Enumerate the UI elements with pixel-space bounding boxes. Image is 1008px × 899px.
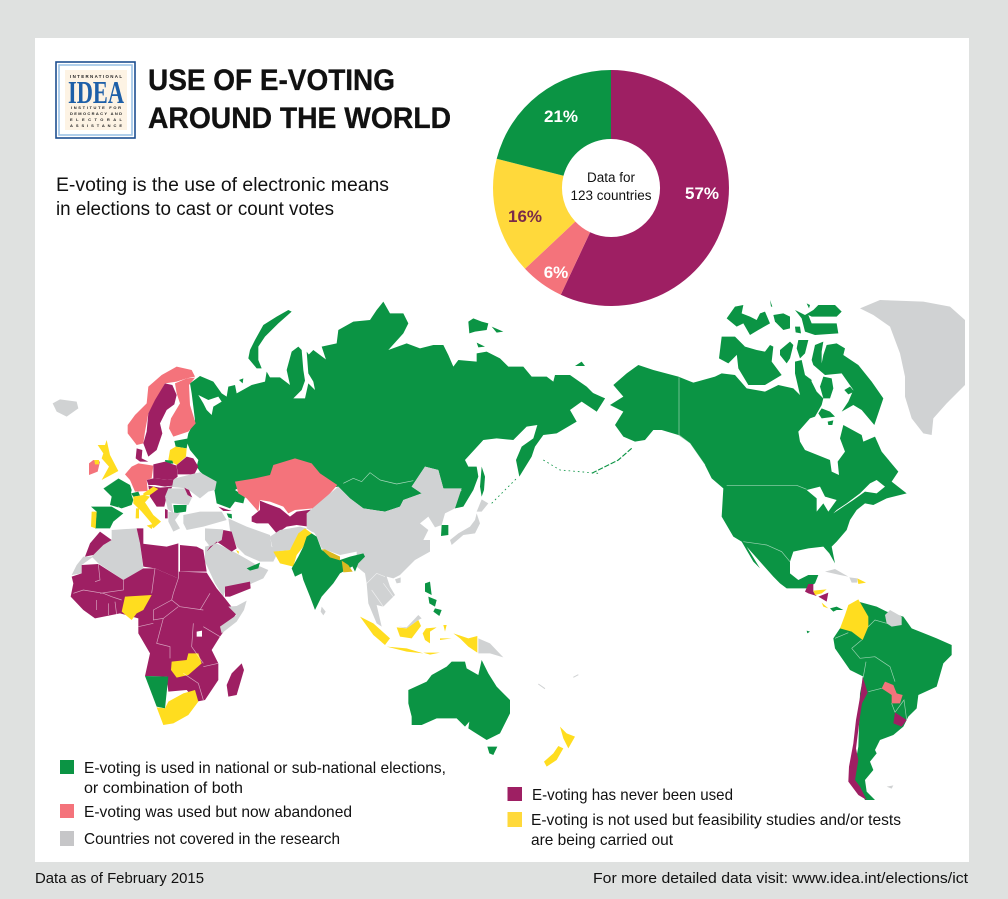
logo: International IDEA: IDEA <box>68 74 124 110</box>
donut chart: Data for <box>587 170 636 185</box>
legend item: feasibility studies: E-voting is not used but feasibility studies and/or tests <box>531 812 901 829</box>
donut chart: 57% <box>685 184 719 203</box>
donut chart: 16% <box>508 207 542 226</box>
donut chart: 123 countries <box>570 188 652 203</box>
logo: International IDEA: DEMOCRACY AND <box>70 111 122 116</box>
legend item: feasibility studies: are being carried out <box>531 832 674 849</box>
legend item: feasibility studies <box>508 812 901 849</box>
donut chart <box>493 70 729 306</box>
intro text: E-voting is the use of electronic means <box>56 175 389 196</box>
title: USE OF E-VOTING <box>148 64 395 97</box>
donut chart: 6% <box>544 263 568 282</box>
legend item: used: or combination of both <box>84 780 243 797</box>
logo: International IDEA: INTERNATIONAL <box>70 74 122 79</box>
legend item: used <box>60 760 446 797</box>
world map <box>53 300 965 800</box>
logo: International IDEA: INSTITUTE FOR <box>71 105 121 110</box>
intro text: in elections to cast or count votes <box>56 199 334 220</box>
map: North America and Greenland <box>590 300 965 588</box>
logo: International IDEA: ASSISTANCE <box>70 123 122 128</box>
map: Europe <box>89 367 217 532</box>
footer: source link: For more detailed data visit: www.idea.int/elections/ict <box>593 870 969 887</box>
title: AROUND THE WORLD <box>148 102 451 135</box>
map: Canadian Arctic islands <box>719 300 883 425</box>
footer: date note: Data as of February 2015 <box>35 870 204 887</box>
map: Middle East, South Asia, Africa <box>53 399 355 725</box>
legend item: used: E-voting is used in national or sub-national elections, <box>84 760 446 777</box>
title <box>148 64 451 135</box>
legend <box>60 760 901 849</box>
map: Southeast Asia, Oceania <box>340 553 578 767</box>
logo: International IDEA <box>56 62 135 138</box>
map: Russia, Mongolia, China and East Asia <box>187 302 605 627</box>
intro text <box>56 175 389 220</box>
legend item: not covered: Countries not covered in the research <box>84 831 340 848</box>
logo: International IDEA: ELECTORAL <box>70 117 123 122</box>
legend item: never used: E-voting has never been used <box>532 787 733 804</box>
map: Central and South America <box>805 569 952 800</box>
legend item: abandoned: E-voting was used but now abandoned <box>84 804 352 821</box>
donut chart: 21% <box>544 107 578 126</box>
